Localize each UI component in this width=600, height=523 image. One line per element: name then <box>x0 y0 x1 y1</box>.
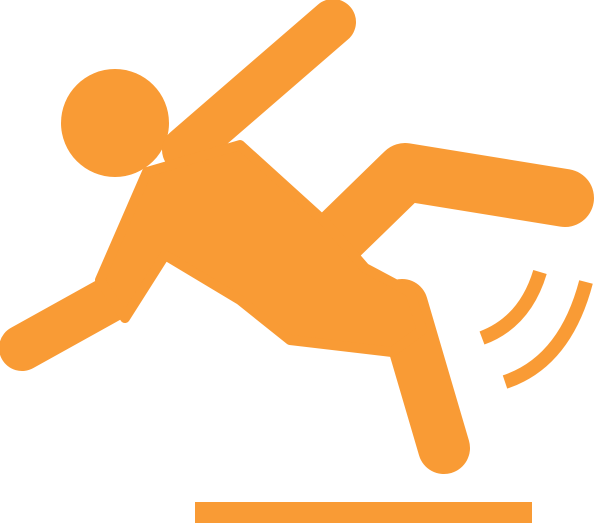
kicked leg <box>330 172 565 245</box>
lower arm <box>22 298 112 348</box>
torso <box>100 145 422 352</box>
floor bar <box>195 502 532 523</box>
raised arm <box>185 22 333 150</box>
head <box>61 69 169 177</box>
motion arcs <box>482 272 586 382</box>
figure: falling person <box>22 22 565 448</box>
standing leg <box>402 305 444 448</box>
